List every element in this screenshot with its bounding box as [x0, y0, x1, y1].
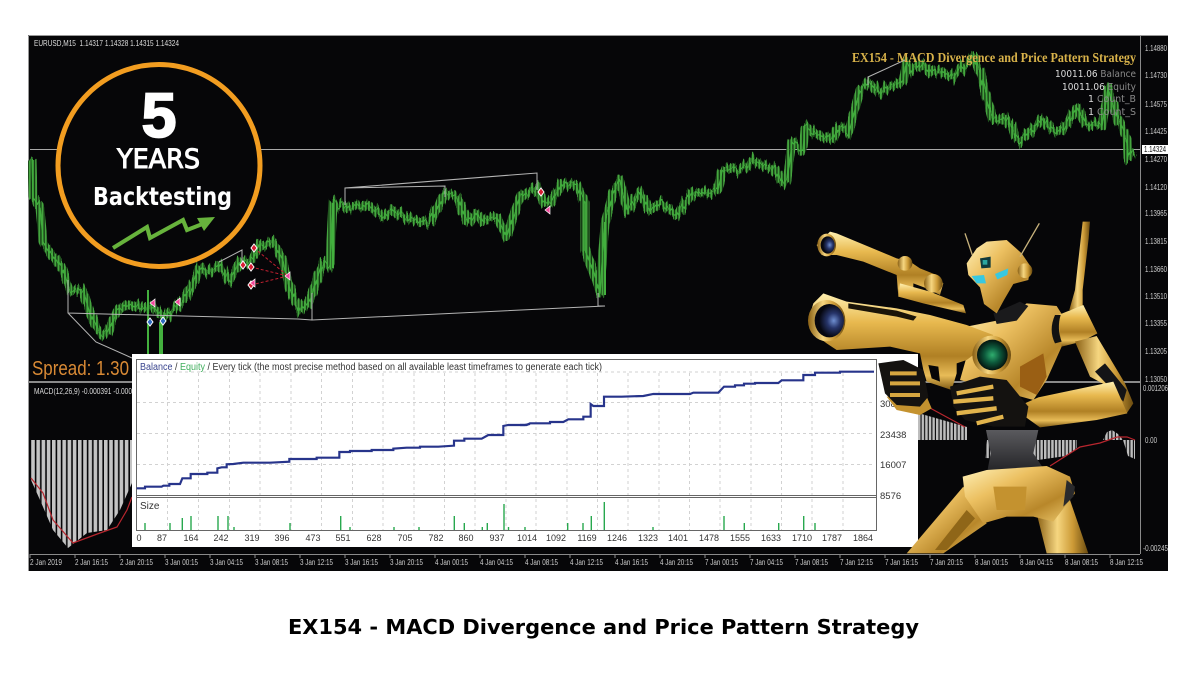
time axis: 8 Jan 00:15 [975, 558, 1008, 567]
price axis: 0.00 [1145, 436, 1157, 445]
time axis: 8 Jan 12:15 [1110, 558, 1143, 567]
spread readout: Spread: 1.30 [32, 358, 129, 380]
time axis: 8 Jan 08:15 [1065, 558, 1098, 567]
backtest report panel [132, 354, 918, 547]
green spikes [148, 203, 605, 354]
MACD histogram [30, 413, 1135, 548]
trade markers [147, 188, 550, 326]
chart frames [136, 360, 876, 530]
pattern trend lines [68, 60, 905, 358]
report legend: Balance / Equity / Every tick (the most precise method based on all available least timeframes to generate each tick) [140, 362, 602, 373]
time axis: 4 Jan 16:15 [615, 558, 648, 567]
current price line [30, 148, 1140, 150]
account stats: 1 Count_B [1088, 94, 1136, 105]
price axis: 1.13965 [1145, 209, 1167, 218]
account stats: 10011.06 Equity [1062, 82, 1136, 93]
x axis labels: 1014 [517, 533, 537, 543]
robot right hand [950, 377, 1028, 427]
x axis labels: 87 [157, 533, 167, 543]
robot forearm [1023, 382, 1127, 427]
time axis: 3 Jan 00:15 [165, 558, 198, 567]
time axis: 3 Jan 16:15 [345, 558, 378, 567]
MACD signal line [31, 408, 1135, 543]
time axis: 4 Jan 04:15 [480, 558, 513, 567]
x axis labels: 628 [366, 533, 382, 543]
x axis labels: 473 [305, 533, 321, 543]
price axis: 1.14120 [1145, 183, 1167, 192]
price axis: 1.14324 [1144, 145, 1166, 154]
x axis labels: 1864 [853, 533, 873, 543]
y axis labels [880, 399, 906, 502]
x axis labels: 1323 [638, 533, 658, 543]
price axis [1140, 36, 1168, 554]
y axis labels: 16007 [880, 460, 906, 471]
time axis: 4 Jan 20:15 [660, 558, 693, 567]
account stats: 1 Count_S [1088, 107, 1136, 118]
x axis labels: 551 [335, 533, 351, 543]
time axis: 4 Jan 12:15 [570, 558, 603, 567]
robot rear scope gun [817, 232, 966, 313]
x axis labels: 1092 [546, 533, 566, 543]
y axis labels: 30869 [880, 399, 906, 410]
price axis: 1.14425 [1145, 127, 1167, 136]
time axis [30, 554, 1143, 567]
price axis: 1.14730 [1145, 71, 1167, 80]
size bars [145, 502, 815, 530]
price axis: 1.13355 [1145, 319, 1167, 328]
robot legs [907, 487, 1088, 553]
x axis labels: 705 [397, 533, 413, 543]
robot green lens [972, 336, 1011, 374]
separator between price and MACD [28, 381, 1140, 383]
x axis labels: 1169 [577, 533, 597, 543]
MACD label: MACD(12,26,9) -0.000391 -0.000 [34, 387, 132, 396]
price axis: 1.13815 [1145, 237, 1167, 246]
balance chart grid [137, 372, 875, 530]
x axis labels: 164 [183, 533, 199, 543]
robot pelvis [963, 466, 1075, 523]
x axis labels: 1478 [699, 533, 719, 543]
time axis: 4 Jan 00:15 [435, 558, 468, 567]
icon: growth arrow [113, 217, 215, 248]
time axis: 3 Jan 20:15 [390, 558, 423, 567]
price axis: 1.13660 [1145, 265, 1167, 274]
robot abdomen [986, 430, 1043, 475]
price axis: 0.001206 [1143, 384, 1168, 393]
price candles [32, 58, 1133, 333]
time axis: 7 Jan 20:15 [930, 558, 963, 567]
x axis labels: 937 [489, 533, 505, 543]
time axis: 2 Jan 2019 [30, 558, 62, 567]
y axis labels: 23438 [880, 430, 906, 441]
x axis labels: 1787 [822, 533, 842, 543]
badge number: 5 [141, 81, 177, 151]
time axis: 3 Jan 12:15 [300, 558, 333, 567]
x axis labels [136, 533, 873, 543]
price axis: 1.14270 [1145, 155, 1167, 164]
x axis labels: 1246 [607, 533, 627, 543]
x axis labels: 1555 [730, 533, 750, 543]
time axis: 7 Jan 00:15 [705, 558, 738, 567]
price axis: -0.00245 [1143, 544, 1168, 553]
price axis: 1.14575 [1145, 100, 1167, 109]
x axis labels: 319 [244, 533, 260, 543]
golden robot illustration [808, 222, 1133, 553]
x axis labels: 782 [428, 533, 444, 543]
x axis labels: 1633 [761, 533, 781, 543]
time axis: 7 Jan 16:15 [885, 558, 918, 567]
account stats: 10011.06 Balance [1055, 69, 1136, 80]
robot shoulder and torso [960, 303, 1063, 400]
balance line right [520, 372, 874, 425]
robot neck [993, 302, 1028, 324]
time axis: 2 Jan 16:15 [75, 558, 108, 567]
time axis: 4 Jan 08:15 [525, 558, 558, 567]
x axis labels: 0 [136, 533, 142, 543]
robot upper arm [1075, 336, 1133, 413]
badge: 5 years backtesting [58, 64, 260, 266]
x axis labels: 242 [213, 533, 229, 543]
account stats [1055, 69, 1136, 118]
time axis: 3 Jan 08:15 [255, 558, 288, 567]
time axis: 7 Jan 08:15 [795, 558, 828, 567]
badge backtesting: Backtesting [93, 182, 232, 211]
price axis: 1.14880 [1145, 44, 1167, 53]
price axis: 1.13205 [1145, 347, 1167, 356]
robot left hand [878, 360, 932, 415]
size label: Size [140, 501, 160, 512]
badge years: YEARS [116, 144, 200, 175]
robot back barrel [1069, 222, 1090, 310]
x axis labels: 1710 [792, 533, 812, 543]
x axis labels: 396 [274, 533, 290, 543]
x axis labels: 1401 [668, 533, 688, 543]
price axis: 1.13050 [1145, 375, 1167, 384]
robot head [965, 223, 1039, 313]
time axis: 3 Jan 04:15 [210, 558, 243, 567]
header: symbol and prices: EURUSD,M15 1.14317 1.14328 1.14315 1.14324 [34, 39, 179, 48]
robot main rifle [808, 293, 993, 390]
price axis: 1.13510 [1145, 292, 1167, 301]
time axis: 8 Jan 04:15 [1020, 558, 1053, 567]
time axis: 7 Jan 12:15 [840, 558, 873, 567]
time axis: 2 Jan 20:15 [120, 558, 153, 567]
bottom title: EX154 - MACD Divergence and Price Pattern Strategy [288, 615, 919, 639]
x axis labels: 860 [458, 533, 474, 543]
balance line left [137, 424, 530, 488]
chart panel [28, 35, 1168, 571]
time axis: 7 Jan 04:15 [750, 558, 783, 567]
strategy name top right: EX154 - MACD Divergence and Price Pattern Strategy [852, 51, 1136, 66]
y axis labels: 8576 [880, 491, 901, 502]
